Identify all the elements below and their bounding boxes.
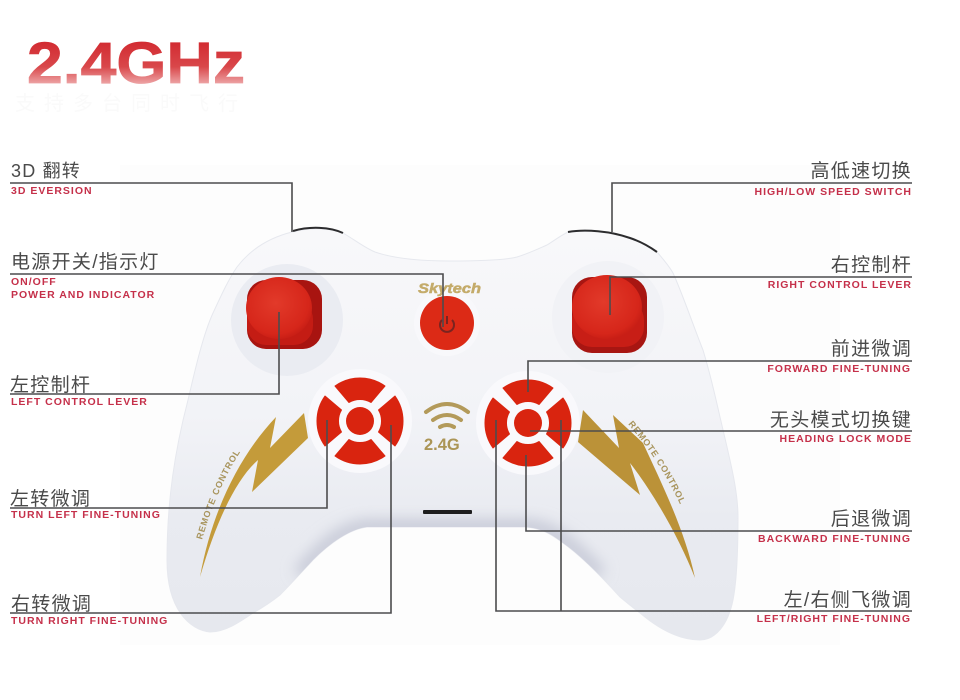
label: 3D eversion [11,161,93,197]
label: right lever: RIGHT CONTROL LEVER [768,279,912,291]
label: right lever [768,254,912,291]
label: turn right [11,593,168,627]
power button [414,290,480,356]
label: turn right: TURN RIGHT FINE-TUNING [11,615,168,627]
faded subtitle: 支持多台同时飞行 [15,92,247,115]
label: speed switch: 高低速切换 [810,160,912,182]
label: forward: FORWARD FINE-TUNING [767,363,911,375]
label: left lever: 左控制杆 [10,374,91,396]
right remote control text: REMOTE CONTROL [628,420,684,504]
label: 3D eversion: 3D EVERSION [11,185,93,197]
label: right lever: 右控制杆 [831,254,912,276]
line: right lever [610,277,912,315]
label: left/right [757,589,912,625]
label: heading: 无头模式切换键 [770,409,912,431]
line: left lever [10,312,279,394]
label: turn left: 左转微调 [10,488,91,510]
label: power [11,251,160,301]
line: speed switch [612,183,912,232]
brand logo: Skytech [418,280,481,296]
line: turn right [10,425,391,613]
line: power [10,274,443,327]
label: power: 电源开关/指示灯 [11,251,160,273]
right gold bolt [578,410,695,578]
line: backward [526,455,912,531]
label: left/right: 左/右侧飞微调 [784,589,912,611]
label: speed switch: HIGH/LOW SPEED SWITCH [754,186,912,198]
label: forward [767,338,912,375]
left control lever [246,277,322,349]
label: left lever [10,374,148,408]
right d-pad [476,371,580,475]
product photo backdrop [120,165,840,645]
left remote control text: REMOTE CONTROL [196,452,240,540]
label: heading: HEADING LOCK MODE [780,433,912,445]
wifi icon [426,404,468,427]
line: turn left [10,420,327,508]
inner arch shadow [300,527,600,575]
label: power: POWER AND INDICATOR [11,289,155,301]
controller [166,226,738,640]
right stick well [552,261,664,373]
label: turn left: TURN LEFT FINE-TUNING [11,509,161,521]
line: heading [530,430,912,432]
label: 3D eversion: 3D 翻转 [11,161,81,181]
leader lines [10,183,912,613]
right control lever [572,275,647,353]
label: backward: BACKWARD FINE-TUNING [758,533,911,545]
shoulder buttons [293,228,657,252]
label: forward: 前进微调 [831,338,912,360]
label: backward: 后退微调 [831,508,912,530]
charging slot [423,510,472,514]
left stick well [231,264,343,376]
label: speed switch [754,160,912,198]
label: backward [758,508,912,545]
line: forward [528,361,912,392]
line: 3D eversion [10,183,292,232]
left gold bolt [200,413,308,577]
line: left/right [496,420,912,611]
label: left lever: LEFT CONTROL LEVER [11,396,148,408]
2.4G label: 2.4G [424,436,460,454]
label: turn left [10,488,161,521]
label: heading [770,409,912,445]
label: power: ON/OFF [11,276,57,288]
label: left/right: LEFT/RIGHT FINE-TUNING [757,613,911,625]
title: 2.4GHz: 2.4GHz [27,31,245,96]
left d-pad [308,369,412,473]
label: turn right: 右转微调 [11,593,92,615]
controller body [167,229,738,640]
